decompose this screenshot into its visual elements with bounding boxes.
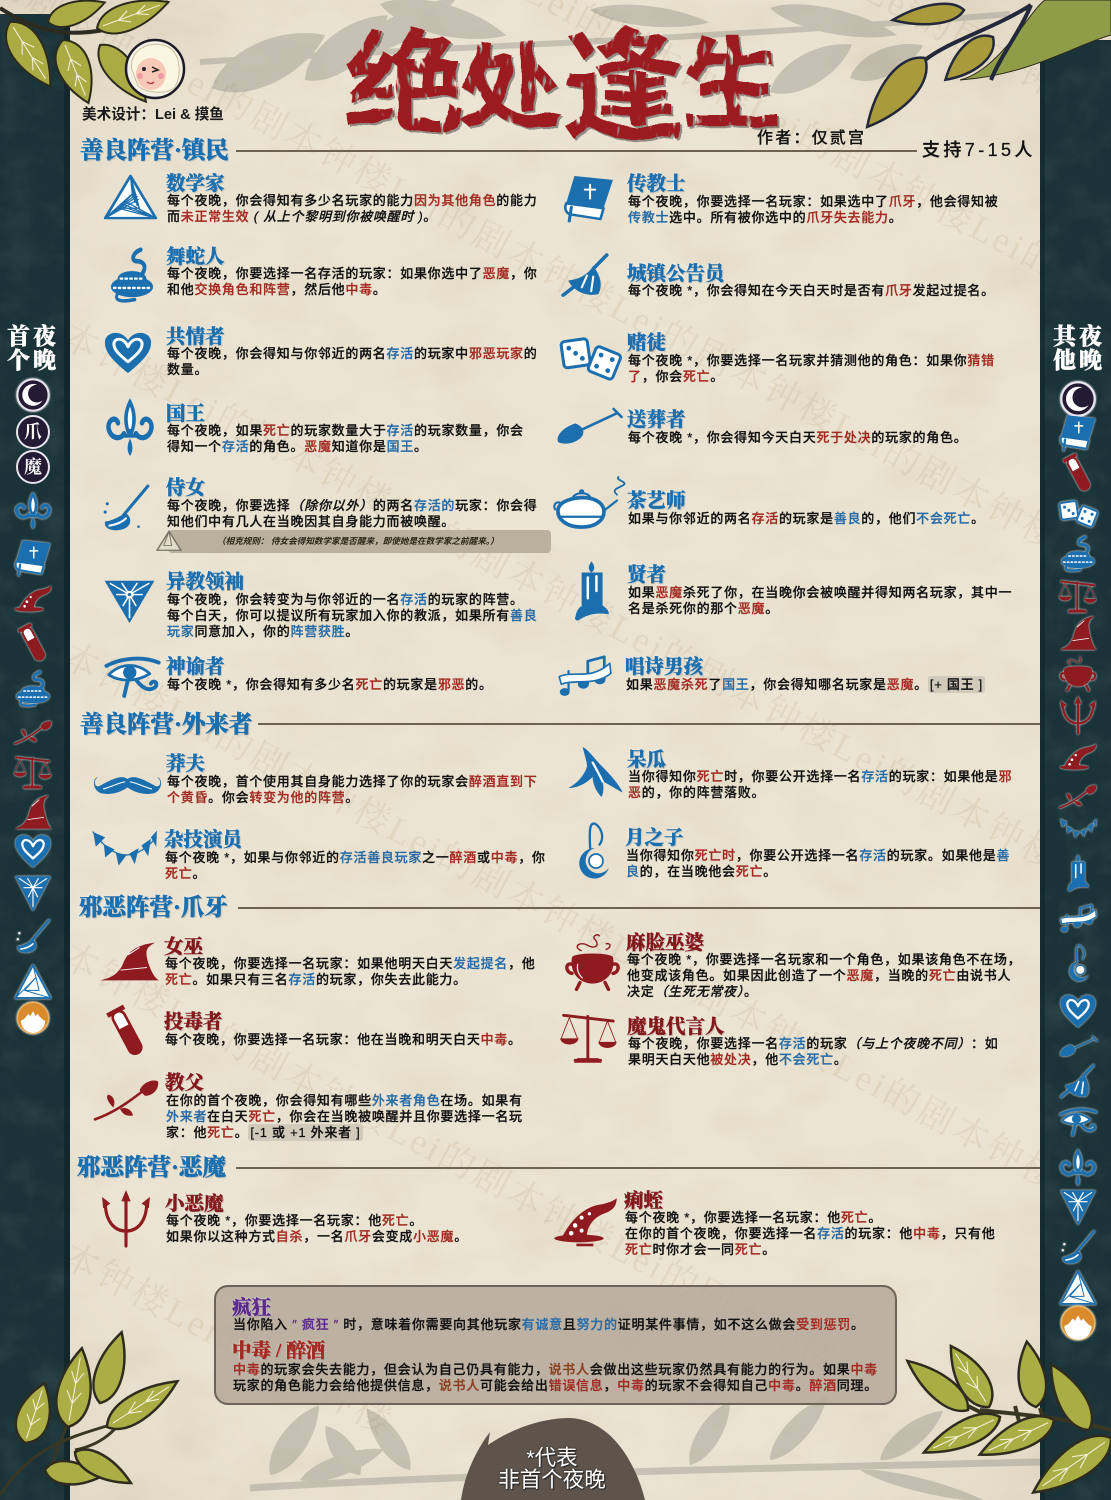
heading: first night — [7, 324, 59, 373]
heading: evil minions: 邪恶阵营·爪牙 — [79, 895, 228, 921]
role: 教父: 教父 — [165, 1073, 204, 1094]
icon: demon info — [16, 450, 50, 484]
column: first night order — [7, 324, 59, 1036]
role: 女巫 — [100, 936, 535, 987]
role: 女巫: 每个夜晚，你要选择一名玩家：如果他明天白天发起提名，他 — [165, 956, 535, 971]
player count: 支持7-15人 — [922, 140, 1036, 160]
role: 城镇公告员 — [561, 253, 995, 298]
role: 呆瓜: 恶的，你的阵营落败。 — [628, 785, 765, 800]
role: 传教士: 传教士 — [627, 174, 686, 195]
footnote text: 非首个夜晚 — [498, 1468, 606, 1492]
icon: mathematician — [14, 963, 52, 1001]
role: 侍女: 侍女 — [166, 478, 205, 499]
role: 麻脸巫婆: 决定（生死无常夜）。 — [627, 984, 758, 999]
role: 呆瓜: 当你得知你死亡时，你要公开选择一名存活的玩家：如果他是邪 — [628, 769, 1012, 784]
role: 贤者 — [575, 562, 1012, 621]
role: 舞蛇人: 每个夜晚，你要选择一名存活的玩家：如果你选中了恶魔，你 — [167, 266, 537, 281]
role: 城镇公告员: 每个夜晚 *，你会得知在今天白天时是否有爪牙发起过提名。 — [628, 283, 995, 298]
role: 月之子: 良的，在当晚他会死亡。 — [626, 864, 777, 879]
role: 送葬者: 每个夜晚 *，你会得知今天白天死于处决的玩家的角色。 — [628, 430, 967, 445]
footnote text: *代表 — [526, 1446, 578, 1470]
role: 赌徒: 赌徒 — [627, 333, 666, 354]
icon: cult leader — [1059, 1188, 1097, 1226]
icon: king — [13, 490, 53, 530]
role: 传教士: 每个夜晚，你要选择一名玩家：如果选中了爪牙，他会得知被 — [628, 194, 998, 209]
icon: undertaker — [1059, 1028, 1097, 1066]
heading: madness: 疯狂 — [232, 1298, 271, 1319]
icon: dawn — [16, 1001, 50, 1035]
icon: town crier — [1059, 1064, 1097, 1102]
heading: good townsfolk: 善良阵营·镇民 — [80, 138, 229, 164]
title: 处 — [458, 13, 564, 147]
role: 女巫: 女巫 — [164, 937, 203, 958]
role: 杂技演员 — [92, 828, 546, 881]
role: 教父: 外来者在白天死亡，你会在当晚被唤醒并且你要选择一名玩 — [166, 1109, 523, 1124]
icon: empath — [1059, 991, 1097, 1029]
icon: cult leader — [14, 874, 52, 912]
role: 异教领袖: 异教领袖 — [166, 572, 244, 593]
role: 传教士: 传教士选中。所有被你选中的爪牙失去能力。 — [628, 210, 902, 225]
heading: other nights: 其夜 — [1053, 324, 1105, 349]
faint leaf silhouettes — [200, 0, 1040, 1500]
icon: choirboy — [1059, 899, 1097, 937]
author credit: 作者：仅贰宫 — [757, 130, 866, 147]
title: 生 — [682, 4, 782, 149]
role: 魔鬼代言人 — [560, 1014, 998, 1067]
role: 数学家: 数学家 — [166, 174, 225, 195]
role: 唱诗男孩 — [558, 655, 985, 696]
icon: acrobat — [1059, 811, 1097, 849]
role: 痢蛭: 每个夜晚 *，你要选择一名玩家：他死亡。 — [625, 1210, 882, 1225]
role: 莽夫 — [94, 752, 537, 805]
role: 痢蛭: 痢蛭 — [624, 1191, 663, 1212]
role: 麻脸巫婆: 每个夜晚 *，你要选择一名玩家和一个角色，如果该角色不在场， — [627, 952, 1021, 967]
role: 舞蛇人: 舞蛇人 — [166, 247, 225, 268]
role: 麻脸巫婆 — [565, 932, 1021, 999]
role: 教父 — [94, 1072, 523, 1141]
role: 舞蛇人: 和他交换角色和阵营，然后他中毒。 — [167, 282, 387, 297]
footnote blob — [461, 1418, 645, 1500]
icon: imp — [1059, 696, 1097, 734]
text: madness: 当你陷入 ″ 疯狂 ″ 时，意味着你需要向其他玩家有诚意且努力的证明某件事情，如不这么做会受到惩罚。 — [233, 1317, 865, 1332]
role: 共情者: 每个夜晚，你会得知与你邻近的两名存活的玩家中邪恶玩家的 — [167, 346, 538, 361]
role: 舞蛇人 — [110, 246, 537, 303]
role: 痢蛭 — [554, 1190, 996, 1257]
avatar — [124, 38, 186, 100]
role: 侍女: 每个夜晚，你要选择（除你以外）的两名存活的玩家：你会得 — [167, 498, 537, 513]
role: 教父: 家：他死亡。[-1 或 +1 外来者 ] — [166, 1125, 360, 1140]
role: 杂技演员: 每个夜晚 *，如果与你邻近的存活善良玩家之一醉酒或中毒，你 — [165, 850, 546, 865]
role: 莽夫: 个黄昏。你会转变为他的阵营。 — [167, 790, 359, 805]
role: 莽夫: 莽夫 — [166, 754, 205, 775]
icon: demon info: 魔 — [24, 457, 42, 477]
icon: dusk — [1059, 380, 1097, 418]
role: 魔鬼代言人: 每个夜晚，你要选择一名存活的玩家（与上个夜晚不同）：如 — [628, 1036, 998, 1051]
heading: other nights — [1053, 325, 1105, 373]
role: 小恶魔: 如果你以这种方式自杀，一名爪牙会变成小恶魔。 — [166, 1229, 468, 1244]
role: 异教领袖: 每个夜晚，你会转变为与你邻近的一名存活的玩家的阵营。 — [167, 592, 524, 607]
role: 茶艺师 — [553, 476, 985, 529]
role: 贤者: 名是杀死你的那个恶魔。 — [628, 601, 779, 616]
icon: sage — [1059, 854, 1097, 892]
role: 数学家: 而未正常生效 ( 从上个黎明到你被唤醒时 )。 — [167, 209, 437, 224]
role: 共情者: 数量。 — [167, 362, 208, 377]
role: 小恶魔: 每个夜晚 *，你要选择一名玩家：他死亡。 — [166, 1213, 423, 1228]
icon: witch — [14, 793, 52, 831]
role: 异教领袖 — [104, 570, 537, 639]
role: 异教领袖: 玩家同意加入，你的阵营获胜。 — [167, 624, 359, 639]
role: 国王: 每个夜晚，如果死亡的玩家数量大于存活的玩家数量，你会 — [167, 423, 524, 438]
icon: devil's advocate — [1059, 578, 1097, 616]
role: 投毒者: 投毒者 — [164, 1012, 223, 1033]
icon: godfather — [14, 714, 52, 752]
role: 贤者: 贤者 — [627, 565, 666, 586]
icon: witch — [1059, 614, 1097, 652]
icon: maid — [14, 918, 52, 956]
heading: first night: 个晚 — [7, 348, 59, 373]
heading: other nights: 他晚 — [1053, 348, 1105, 373]
credit: art design: 美术设计：Lei & 摸鱼 — [82, 107, 224, 123]
role: 传教士 — [564, 172, 998, 225]
column: other nights order — [1040, 325, 1111, 1345]
role: 国王: 国王 — [166, 404, 205, 425]
icon: leech — [1059, 739, 1097, 777]
icon: snake charmer — [1059, 534, 1097, 572]
role: 莽夫: 每个夜晚，首个使用其自身能力选择了你的玩家会醉酒直到下 — [167, 774, 537, 789]
text: poison and drunk: 中毒的玩家会失去能力，但会认为自己仍具有能力，说书人会做出这些玩家仍然具有能力的行为。如果中毒 — [233, 1362, 878, 1377]
role: 呆瓜: 呆瓜 — [627, 750, 666, 771]
role: 魔鬼代言人: 魔鬼代言人 — [627, 1017, 725, 1038]
text: poison and drunk: 玩家的角色能力会给他提供信息，说书人可能会给出错误信息，中毒的玩家不会得知自己中毒。醉酒同理。 — [233, 1378, 878, 1393]
icon: mathematician — [1059, 1269, 1097, 1307]
foliage: bottom right — [905, 1340, 1111, 1494]
role: 神谕者 — [104, 656, 493, 698]
role: 神谕者: 神谕者 — [166, 657, 225, 678]
role: 教父: 在你的首个夜晚，你会得知有哪些外来者角色在场。如果有 — [166, 1093, 523, 1108]
role: 杂技演员: 死亡。 — [165, 866, 206, 881]
role: 茶艺师: 如果与你邻近的两名存活的玩家是善良的，他们不会死亡。 — [628, 511, 985, 526]
role: 小恶魔 — [102, 1190, 468, 1248]
icon: oracle — [1059, 1103, 1097, 1141]
role: 月之子: 月之子 — [625, 828, 684, 849]
role: 数学家 — [104, 172, 537, 224]
jinx rule bar — [156, 530, 551, 553]
role: 投毒者: 每个夜晚，你要选择一名玩家：他在当晚和明天白天中毒。 — [165, 1032, 522, 1047]
icon: preacher — [1059, 413, 1097, 451]
role: 投毒者 — [106, 1004, 522, 1055]
role: 唱诗男孩: 如果恶魔杀死了国王，你会得知哪名玩家是恶魔。[+ 国王 ] — [626, 677, 983, 692]
icon: dusk — [14, 376, 52, 414]
role: 数学家: 每个夜晚，你会得知有多少名玩家的能力因为其他角色的能力 — [167, 193, 537, 208]
role: 麻脸巫婆: 麻脸巫婆 — [626, 933, 704, 954]
footnote text — [498, 1446, 606, 1492]
icon: preacher — [14, 538, 52, 576]
text: poison and drunk — [233, 1362, 878, 1393]
panel: rules box — [214, 1285, 897, 1405]
heading: first night: 首夜 — [7, 324, 59, 349]
role: 赌徒 — [560, 332, 995, 384]
role: 侍女 — [104, 476, 551, 553]
role: 国王: 得知一个存活的角色。恶魔知道你是国王。 — [167, 439, 428, 454]
role: 贤者: 如果恶魔杀死了你，在当晚你会被唤醒并得知两名玩家，其中一 — [628, 585, 1012, 600]
icon: moonchild — [1059, 944, 1097, 982]
icon: poisoner — [14, 624, 52, 662]
icon: king — [1059, 1148, 1097, 1186]
role: 麻脸巫婆: 他变成该角色。如果因此创造了一个恶魔，当晚的死亡由说书人 — [627, 968, 1011, 983]
icon: poisoner — [1059, 454, 1097, 492]
icon: maid — [1059, 1229, 1097, 1267]
role: 女巫: 死亡。如果只有三名存活的玩家，你失去此能力。 — [165, 972, 467, 987]
jinx rule bar: （相克规则： 侍女会得知数学家是否醒来，即使她是在数学家之前醒来。） — [217, 536, 499, 546]
role: 侍女: 知他们中有几人在当晚因其自身能力而被唤醒。 — [167, 514, 455, 529]
role: 赌徒: 每个夜晚 *，你要选择一名玩家并猜测他的角色：如果你猜错 — [628, 353, 995, 368]
role: 国王 — [106, 398, 524, 456]
icon: godfather — [1059, 778, 1097, 816]
role: 送葬者: 送葬者 — [627, 410, 686, 431]
role: 共情者: 共情者 — [166, 327, 225, 348]
title — [344, 0, 782, 166]
heading: good outsiders: 善良阵营·外来者 — [80, 712, 252, 738]
role: 异教领袖: 每个白天，你可以提议所有玩家加入你的教派，如果所有善良 — [167, 608, 537, 623]
role: 茶艺师: 茶艺师 — [627, 491, 686, 512]
icon: minion info — [16, 415, 50, 449]
icon: devil's advocate — [14, 754, 52, 792]
foliage: bottom left — [0, 1330, 180, 1496]
role: 痢蛭: 在你的首个夜晚，你要选择一名存活的玩家：他中毒，只有他 — [625, 1226, 996, 1241]
role: 共情者 — [104, 326, 538, 377]
icon: empath — [14, 831, 52, 869]
role: 神谕者: 每个夜晚 *，你会得知有多少名死亡的玩家是邪恶的。 — [167, 677, 493, 692]
role: 呆瓜 — [568, 747, 1012, 800]
icon: gambler — [1059, 494, 1097, 532]
role: 小恶魔: 小恶魔 — [165, 1194, 224, 1215]
role: 月之子 — [579, 822, 1010, 879]
role: 赌徒: 了，你会死亡。 — [628, 369, 724, 384]
role: 月之子: 当你得知你死亡时，你要公开选择一名存活的玩家。如果他是善 — [626, 848, 1010, 863]
icon: leech — [14, 581, 52, 619]
foliage: top right — [866, 0, 1111, 129]
icon: snake charmer — [14, 669, 52, 707]
role: 唱诗男孩: 唱诗男孩 — [625, 657, 703, 678]
role: 魔鬼代言人: 果明天白天他被处决，他不会死亡。 — [628, 1052, 848, 1067]
heading: evil demons: 邪恶阵营·恶魔 — [77, 1155, 226, 1181]
icon: pit-hag — [1059, 653, 1097, 691]
role: 杂技演员: 杂技演员 — [164, 830, 242, 851]
role: 送葬者 — [558, 408, 967, 445]
text: 死亡时你才会一同死亡。 — [625, 1242, 776, 1257]
heading: poison and drunk: 中毒 / 醉酒 — [232, 1341, 325, 1362]
icon: dawn — [1059, 1304, 1097, 1342]
foliage: top left — [0, 0, 170, 105]
icon: minion info: 爪 — [24, 422, 42, 442]
role: 城镇公告员: 城镇公告员 — [627, 264, 725, 285]
